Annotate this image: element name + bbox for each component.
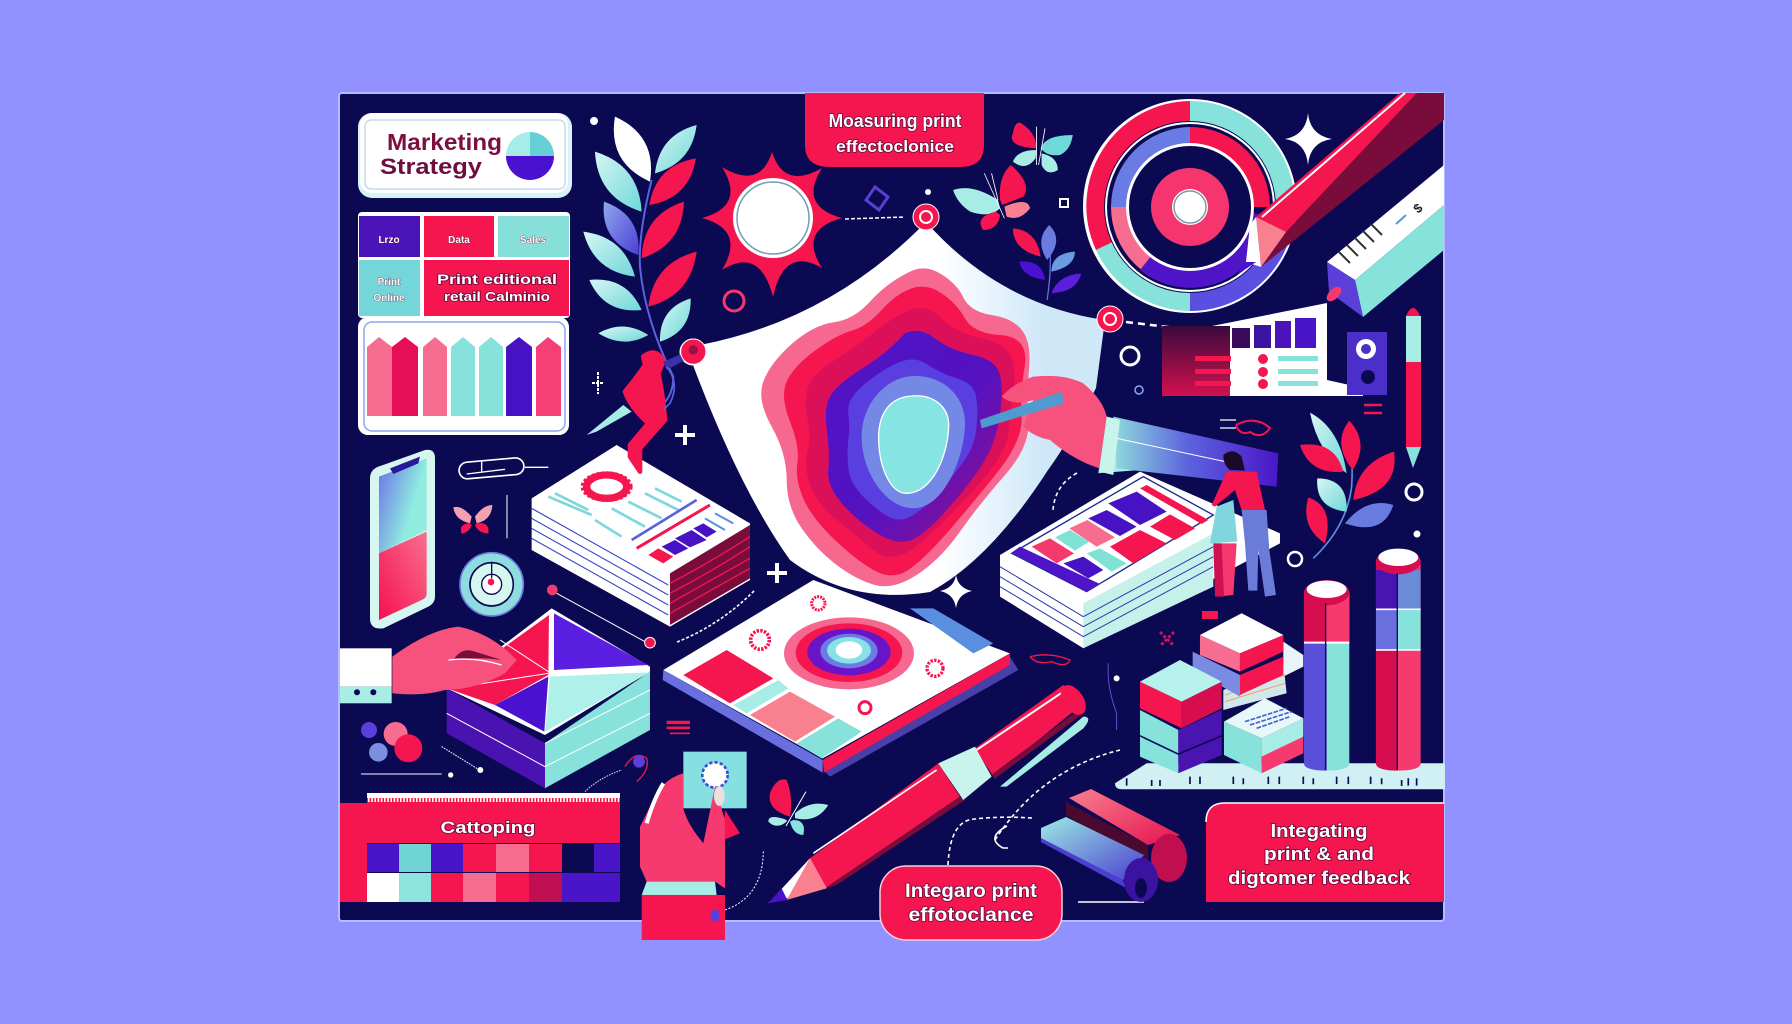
magazine stack right xyxy=(1000,472,1280,648)
large red pencil lower centre xyxy=(768,681,1091,903)
hand holding card xyxy=(640,752,763,940)
isometric cubes and column chart xyxy=(1115,549,1445,789)
table of coloured cells xyxy=(358,212,570,318)
stack side dark xyxy=(670,525,750,625)
bottom-centre pill label: Integaro print xyxy=(905,881,1038,902)
sleeve of right arm xyxy=(1099,417,1278,487)
small ring and dot accents xyxy=(590,117,1422,646)
sun illustration xyxy=(702,152,905,297)
left paper stack xyxy=(532,445,750,627)
bottom-centre pill label xyxy=(880,866,1062,940)
paperclip icon xyxy=(458,457,548,479)
figure: woman in red xyxy=(1212,451,1276,597)
bottom-right label: integrating print and customer feedback xyxy=(1206,803,1444,902)
paper sheet with contour blob xyxy=(680,204,1210,595)
small butterfly bottom xyxy=(768,779,828,835)
small scribble cube xyxy=(1224,698,1303,773)
front left cubes xyxy=(1140,660,1222,773)
top label: measuring print effectiveness: effectoclonice xyxy=(836,137,954,156)
swatch label: Cattoping xyxy=(440,818,536,837)
top label: measuring print effectiveness xyxy=(805,93,984,167)
back cube stack xyxy=(1193,613,1303,710)
top label: measuring print effectiveness: Moasuring print xyxy=(828,111,962,131)
table of coloured cells: retail Calminio xyxy=(444,289,550,304)
pins xyxy=(680,204,1210,365)
bottom-right label: integrating print and customer feedback: Integating xyxy=(1270,821,1368,841)
small purple plant xyxy=(1013,225,1081,300)
table of coloured cells: Data xyxy=(448,235,470,246)
gear icon xyxy=(583,473,631,500)
table of coloured cells: Online xyxy=(373,293,405,304)
bottom-right label: integrating print and customer feedback: print & and xyxy=(1264,844,1374,864)
climbing red figure xyxy=(587,339,706,472)
centre isometric card xyxy=(663,580,1120,777)
bottom-centre pill label: effotoclance xyxy=(908,905,1034,926)
base ruler xyxy=(1115,763,1445,789)
table of coloured cells: Print editional xyxy=(437,271,557,287)
table of coloured cells: Sales xyxy=(520,235,547,246)
pin line xyxy=(547,585,655,648)
figure: teal skirt person xyxy=(1210,500,1237,597)
plus and sparkle icons xyxy=(592,372,972,608)
people figures xyxy=(1210,451,1276,597)
pie icon xyxy=(506,132,554,180)
title text: Strategy xyxy=(380,154,483,179)
bottom-right label: integrating print and customer feedback: digtomer feedback xyxy=(1228,868,1411,888)
leaf branch illustration xyxy=(583,117,697,407)
mini report card top right xyxy=(1162,303,1363,396)
title text xyxy=(380,129,502,179)
ruler block right: $ xyxy=(1410,200,1426,216)
left hand with cuff xyxy=(340,627,517,703)
vertical pen right xyxy=(1406,308,1421,468)
small butterfly left xyxy=(453,495,507,538)
column bar one xyxy=(1304,580,1349,771)
column bar two xyxy=(1376,549,1421,771)
table of coloured cells: Lrzo xyxy=(378,235,400,246)
table of coloured cells: Print xyxy=(378,277,401,288)
title text: Marketing xyxy=(387,129,502,155)
sparkle xyxy=(1285,113,1332,165)
folded diamond box xyxy=(340,585,690,792)
big pencil top right xyxy=(1237,93,1444,275)
speaker icon xyxy=(1347,332,1387,395)
rollers bottom right xyxy=(1041,789,1187,902)
smartphone xyxy=(370,450,435,629)
concentric print target xyxy=(784,617,914,689)
contour blob xyxy=(761,268,1030,586)
small target gauge xyxy=(460,553,523,616)
target ring chart xyxy=(1083,99,1297,313)
arrow bar chart card xyxy=(358,317,569,435)
dashed connectors and small marks xyxy=(677,473,1144,902)
ruler block right xyxy=(1324,165,1444,317)
main navy panel xyxy=(339,93,1444,921)
colored dots cluster xyxy=(361,722,422,762)
hand holding pen on paper xyxy=(980,376,1140,473)
plant right xyxy=(1300,413,1395,558)
marketing strategy title card xyxy=(358,113,572,198)
butterflies top xyxy=(953,123,1073,230)
bottom-left colour swatch ruler xyxy=(340,793,620,902)
